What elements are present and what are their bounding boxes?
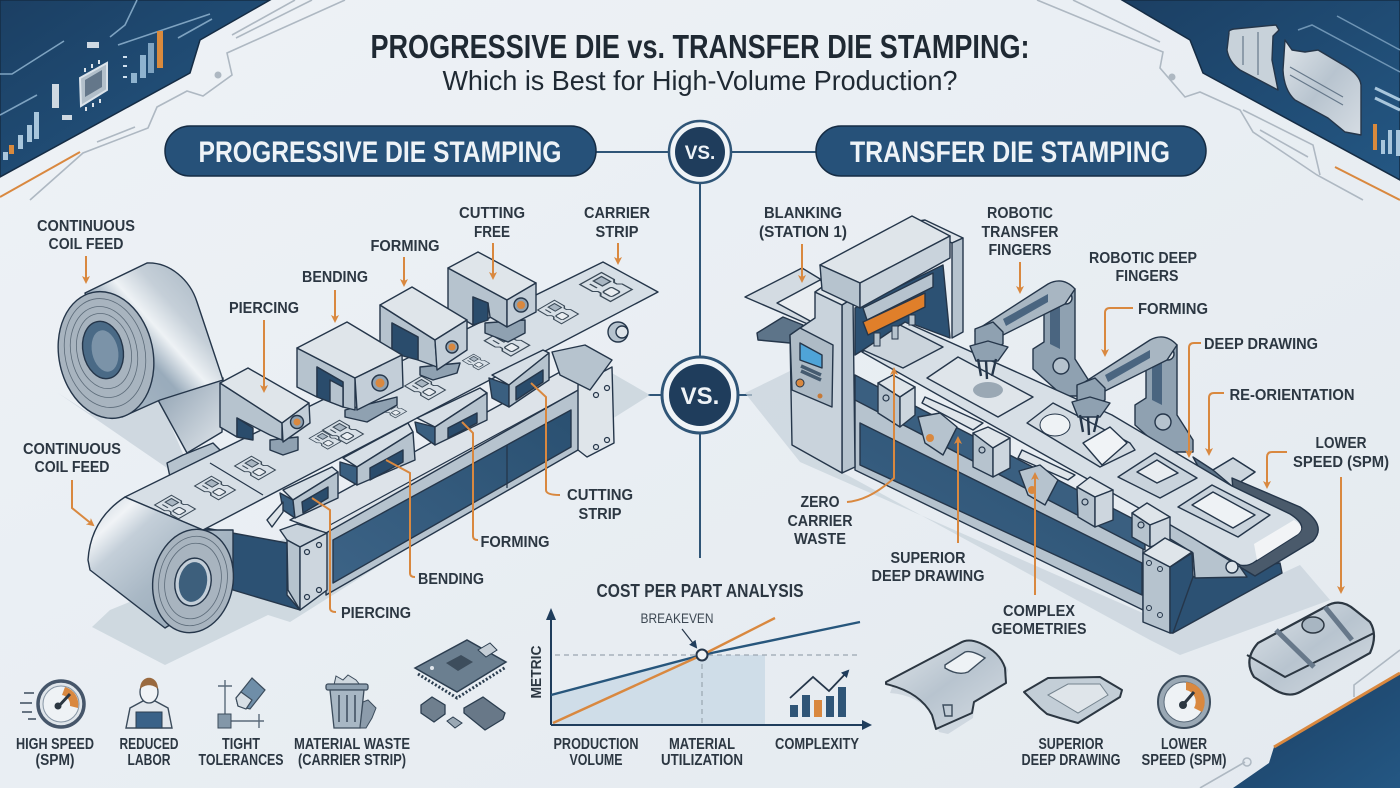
icon: bars top right	[1373, 124, 1400, 156]
label: robotic transfer fingers	[982, 205, 1059, 292]
axes	[546, 608, 872, 730]
icon: stamped part large	[1283, 40, 1361, 135]
badge: vs center	[662, 357, 738, 433]
label: zero carrier waste: CARRIER	[788, 513, 853, 530]
label: carrier strip	[584, 205, 650, 263]
badge: vs center: VS.	[681, 383, 719, 410]
rollers and supports	[552, 322, 628, 390]
feed block	[167, 443, 227, 477]
label: bending top	[302, 269, 368, 321]
label: carrier strip: CARRIER	[584, 205, 650, 222]
icon: bars top left	[123, 31, 163, 83]
label: zero carrier waste: ZERO	[800, 494, 840, 511]
icon: bars bottom left	[3, 112, 39, 160]
press 1	[220, 368, 310, 455]
deep drawn part	[1027, 403, 1135, 467]
icon: deep drawn tray	[1024, 677, 1122, 723]
label: blanking: BLANKING	[764, 205, 842, 222]
label: superior deep drawing: DEEP DRAWING	[872, 568, 984, 585]
x label: material utilization	[661, 736, 743, 769]
label: cutting strip	[531, 383, 633, 523]
machine leg right	[1143, 538, 1193, 633]
circuit lines	[0, 0, 1400, 200]
labels: transfer die	[759, 205, 1389, 638]
label: blanking: (STATION 1)	[759, 224, 847, 241]
label: superior deep drawing: SUPERIOR	[890, 550, 966, 567]
text: high speed: HIGH SPEED	[16, 736, 94, 753]
label: lower speed	[1267, 435, 1389, 592]
label: lower speed: LOWER	[1316, 435, 1367, 452]
label: carrier strip: STRIP	[596, 224, 639, 241]
icon: high speed gauge	[20, 681, 84, 727]
label: zero carrier waste	[788, 369, 894, 548]
text: superior deep drawing: SUPERIOR	[1038, 736, 1104, 753]
x label: complexity: COMPLEXITY	[775, 736, 859, 753]
strip with stamped parts	[125, 262, 658, 530]
center divider lines	[596, 152, 816, 558]
text: lower speed: LOWER	[1161, 736, 1207, 753]
bottom-right corner panel	[1200, 650, 1400, 788]
machine base	[205, 367, 614, 610]
press head	[820, 216, 950, 308]
label: cutting free: FREE	[474, 224, 510, 241]
press interior	[855, 220, 963, 355]
x label: material utilization: MATERIAL	[669, 736, 735, 753]
chart: cost per part analysis	[528, 581, 872, 769]
title: Which is Best for High-Volume Production?	[442, 65, 958, 96]
label: piercing top: PIERCING	[229, 300, 299, 317]
coil bottom	[88, 497, 241, 639]
icon: trash can	[326, 675, 376, 728]
column with control panel	[790, 283, 855, 473]
label: bending top: BENDING	[302, 269, 368, 286]
breakeven marker: BREAKEVEN	[640, 611, 714, 626]
flat sheet part	[927, 357, 1033, 417]
label: forming top: FORMING	[370, 238, 440, 255]
x label: production volume: PRODUCTION	[554, 736, 638, 753]
text: material waste: MATERIAL WASTE	[294, 736, 410, 753]
panel: progressive die machine	[47, 252, 658, 665]
icon: stamped body panel	[886, 640, 1008, 734]
x label: production volume: VOLUME	[570, 752, 623, 769]
label: robotic transfer fingers: ROBOTIC	[987, 205, 1053, 222]
label: robotic deep fingers: FINGERS	[1116, 268, 1179, 285]
lower die blocks	[267, 350, 549, 527]
title	[370, 28, 1030, 96]
conveyor surface	[862, 322, 1318, 576]
text: superior deep drawing: DEEP DRAWING	[1022, 752, 1120, 769]
text: material waste: (CARRIER STRIP)	[298, 752, 406, 769]
recessed dark area	[855, 375, 1145, 550]
icon: chip	[80, 60, 107, 111]
press 2	[297, 322, 403, 422]
text: lower speed: SPEED (SPM)	[1142, 752, 1226, 769]
label: piercing bottom	[312, 498, 411, 622]
label: re-orientation: RE-ORIENTATION	[1230, 387, 1354, 404]
lower die blocks	[878, 375, 1170, 547]
labels: progressive die	[23, 205, 650, 622]
text: lower speed	[1142, 736, 1226, 769]
text: reduced labor: REDUCED	[120, 736, 178, 753]
floor shadows	[58, 365, 650, 665]
heading: transfer	[816, 126, 1206, 176]
text: tight tolerances: TOLERANCES	[198, 752, 284, 769]
bench and blank sheets	[745, 268, 840, 343]
icon: tolerances	[218, 678, 265, 728]
label: complex geometries: GEOMETRIES	[992, 621, 1087, 638]
text: high speed	[16, 736, 94, 769]
panel: transfer die machine	[745, 216, 1330, 655]
label: forming top	[370, 238, 440, 285]
label: continuous coil feed top: COIL FEED	[48, 236, 124, 253]
label: deep drawing	[1189, 336, 1318, 456]
icon: mini bar chart	[790, 671, 848, 717]
legend: transfer benefits	[886, 603, 1374, 769]
part on coil	[155, 495, 195, 519]
label: forming bottom: FORMING	[480, 534, 550, 551]
badge: vs top	[669, 121, 731, 183]
label: continuous coil feed bottom: COIL FEED	[34, 459, 110, 476]
square part	[1118, 453, 1197, 498]
label: re-orientation	[1209, 387, 1354, 454]
text: tight tolerances: TIGHT	[222, 736, 260, 753]
label: continuous coil feed top	[37, 218, 135, 282]
badge: vs top: VS.	[685, 143, 715, 164]
icon: fuel tank	[1247, 603, 1374, 695]
label: piercing top	[229, 300, 299, 391]
text: reduced labor	[120, 736, 178, 769]
label: cutting strip: STRIP	[578, 506, 622, 523]
floor shadow	[745, 370, 1330, 655]
label: cutting free	[459, 205, 525, 278]
label: zero carrier waste: WASTE	[794, 531, 846, 548]
label: robotic deep fingers: ROBOTIC DEEP	[1089, 250, 1197, 267]
breakeven marker	[640, 611, 714, 660]
text: tight tolerances	[198, 736, 284, 769]
icon: worker	[126, 678, 172, 728]
label: deep drawing: DEEP DRAWING	[1204, 336, 1318, 353]
label: lower speed: SPEED (SPM)	[1293, 454, 1389, 471]
label: bending bottom: BENDING	[418, 571, 484, 588]
label: bending bottom	[386, 460, 484, 588]
label: complex geometries: COMPLEX	[1003, 603, 1075, 620]
robot arm 2	[1072, 337, 1177, 435]
label: forming bottom	[462, 422, 550, 551]
y axis label: METRIC	[528, 645, 545, 698]
label: forming: FORMING	[1138, 301, 1208, 318]
text: high speed: (SPM)	[36, 752, 74, 769]
label: blanking	[759, 205, 847, 281]
label: robotic deep fingers	[1089, 250, 1197, 285]
chart title: COST PER PART ANALYSIS	[596, 581, 804, 601]
label: robotic transfer fingers: TRANSFER	[982, 224, 1059, 241]
heading: progressive: PROGRESSIVE DIE STAMPING	[198, 136, 562, 169]
label: robotic transfer fingers: FINGERS	[988, 242, 1052, 259]
blue line	[551, 622, 860, 695]
label: continuous coil feed bottom: CONTINUOUS	[23, 441, 121, 458]
title: PROGRESSIVE DIE vs. TRANSFER DIE STAMPING:	[370, 28, 1030, 65]
shaded area	[551, 655, 765, 725]
coil top	[47, 263, 223, 453]
press 4	[448, 252, 536, 342]
robot arm 1	[970, 281, 1075, 379]
robot pillar 1	[1033, 289, 1091, 396]
label: superior deep drawing	[872, 438, 984, 585]
icon: circuit board	[415, 640, 506, 698]
label: piercing bottom: PIERCING	[341, 605, 411, 622]
icon: stamped part small	[1227, 25, 1279, 90]
icon: chips	[421, 697, 505, 730]
finished part	[1178, 485, 1270, 537]
x label: production volume	[554, 736, 638, 769]
long base	[855, 397, 1282, 633]
top-right corner panel	[1122, 0, 1400, 180]
legend: progressive benefits	[16, 640, 506, 769]
orange line	[553, 618, 775, 723]
text: material waste	[294, 736, 410, 769]
label: complex geometries	[992, 474, 1087, 638]
x label: material utilization: UTILIZATION	[661, 752, 743, 769]
top-left corner panel	[0, 0, 270, 177]
label: forming	[1105, 301, 1208, 355]
robot pillar 2	[1135, 345, 1255, 487]
side plate	[1167, 523, 1247, 578]
label: continuous coil feed bottom	[23, 441, 121, 525]
icon: lower speed gauge	[1158, 676, 1210, 728]
label: continuous coil feed top: CONTINUOUS	[37, 218, 135, 235]
label: cutting strip: CUTTING	[567, 487, 633, 504]
text: reduced labor: LABOR	[128, 752, 171, 769]
heading: transfer: TRANSFER DIE STAMPING	[850, 136, 1170, 169]
press 3	[380, 287, 467, 380]
text: superior deep drawing	[1022, 736, 1120, 769]
press die and pins	[863, 273, 933, 346]
label: cutting free: CUTTING	[459, 205, 525, 222]
heading: progressive	[165, 126, 596, 176]
